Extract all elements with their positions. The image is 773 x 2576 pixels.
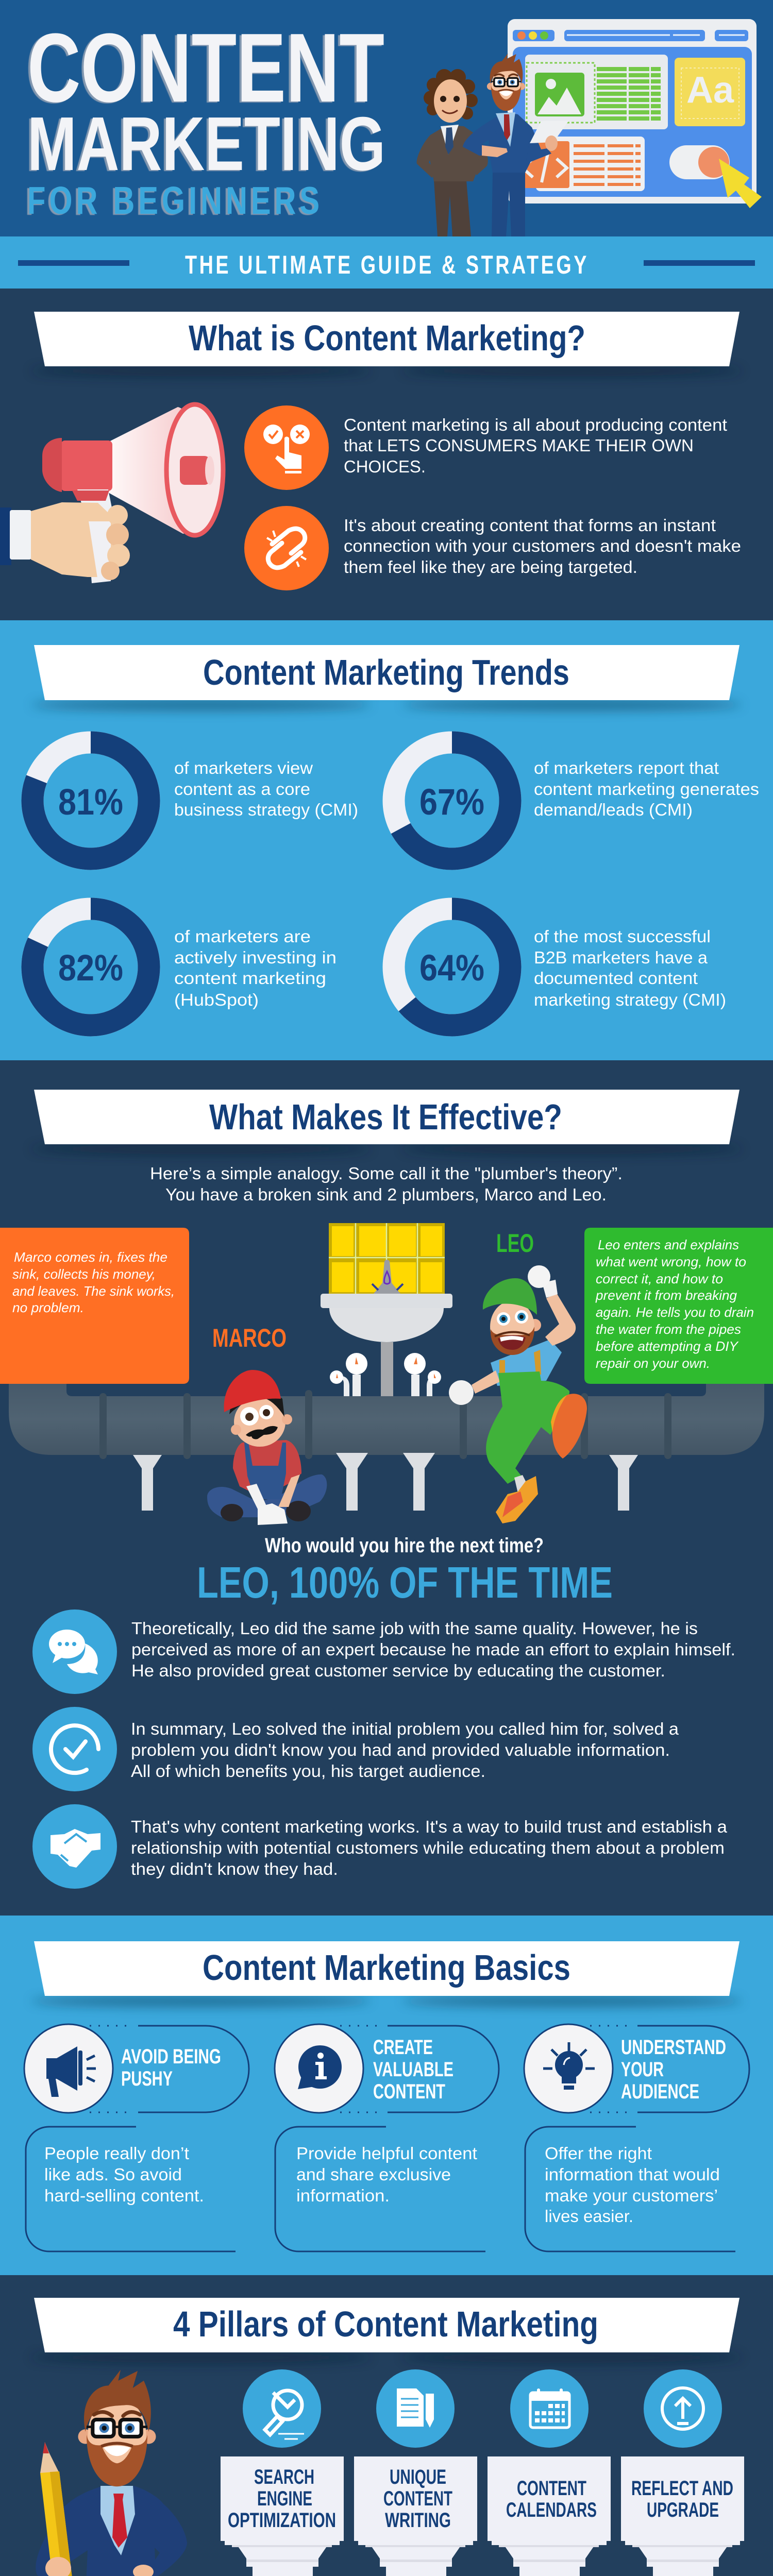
icon: check circle	[32, 1707, 117, 1791]
text box: understand your audience: Offer the right	[545, 2144, 652, 2163]
text box: avoid being pushy: hard-selling content.	[44, 2186, 204, 2205]
donut: 67%	[394, 742, 510, 859]
pillar: content calendars: CONTENT	[517, 2477, 586, 2500]
banner heading: 4 Pillars of Content Marketing	[173, 2304, 598, 2344]
text block: theoretically: perceived as more of an expert because he made an effort to explain himself.	[131, 1640, 735, 1659]
banner heading	[31, 2298, 742, 2363]
character: Marco	[207, 1370, 327, 1525]
pill: create valuable content: VALUABLE	[373, 2058, 453, 2081]
text block: summary: In summary, Leo solved the initial problem you called him for, solved a	[131, 1719, 679, 1738]
text block: theoretically: Theoretically, Leo did the same job with the same quality. However, he is	[131, 1619, 698, 1638]
text block: summary: All of which benefits you, his target audience.	[131, 1761, 485, 1781]
question: Who would you hire the next time?	[265, 1534, 544, 1557]
section: 4 pillars	[0, 2275, 773, 2576]
text box: avoid being pushy: like ads. So avoid	[44, 2165, 182, 2184]
pillar: unique content writing: UNIQUE	[390, 2466, 446, 2488]
title: CONTENT	[27, 13, 384, 123]
donut: 81%	[32, 742, 149, 859]
text block: why it works: That's why content marketing works. It's a way to build trust and establish a	[131, 1817, 728, 1836]
stat text: 82%: (HubSpot)	[174, 990, 259, 1009]
text block: connection: them feel like they are being targeted.	[344, 557, 637, 577]
section: what makes it effective	[0, 1060, 773, 1916]
icon: chain link	[244, 506, 329, 590]
stat text: 64%	[534, 927, 726, 1009]
text block: connection	[344, 516, 741, 577]
callout: Marco: no problem.	[12, 1300, 84, 1315]
donut: 81%: 81%	[58, 782, 123, 823]
pill: understand your audience	[524, 2024, 749, 2113]
text box: create valuable content: Provide helpful content	[296, 2144, 477, 2163]
text box: understand your audience	[525, 2127, 735, 2251]
text box: understand your audience: lives easier.	[545, 2207, 633, 2226]
icon: megaphone and hand	[0, 404, 223, 583]
pill: create valuable content: CONTENT	[373, 2080, 445, 2103]
title: FOR BEGINNERS	[27, 179, 323, 222]
section: content marketing basics	[0, 1916, 773, 2275]
pill: avoid being pushy: AVOID BEING	[121, 2045, 221, 2068]
callout: Leo: before attempting a DIY	[596, 1338, 739, 1354]
text block: connection: It's about creating content that forms an instant	[344, 516, 716, 535]
pillar: content calendars: CALENDARS	[506, 2499, 597, 2521]
tiled window	[329, 1223, 445, 1294]
title: MARKETING	[27, 101, 385, 187]
subtitle band: THE ULTIMATE GUIDE & STRATEGY	[185, 250, 589, 279]
pillar: search engine optimization: SEARCH	[254, 2466, 314, 2488]
banner heading	[31, 1941, 742, 2007]
donut: 82%: 82%	[58, 948, 123, 989]
stat text: 81%: of marketers view	[174, 758, 313, 777]
donut: 82%	[32, 909, 149, 1025]
callout: Leo: again. He tells you to drain	[596, 1304, 754, 1320]
stat text: 82%	[174, 927, 337, 1009]
icon: search	[243, 2369, 321, 2448]
pillar: content calendars	[488, 2369, 611, 2576]
callout: Leo: the water from the pipes	[596, 1321, 741, 1337]
pillar: search engine optimization: OPTIMIZATION	[228, 2509, 336, 2532]
intro text: Here’s a simple analogy. Some call it the "plumber's theory”.	[150, 1164, 623, 1183]
donut: 67%: 67%	[419, 782, 484, 823]
text box: understand your audience: information that would	[545, 2165, 720, 2184]
character: curly-haired man	[417, 69, 488, 236]
icon: info bubble	[298, 2045, 342, 2089]
text block: theoretically	[131, 1619, 735, 1680]
donut: 64%	[394, 909, 510, 1025]
text box: create valuable content	[275, 2127, 485, 2251]
stat text: 81%	[174, 758, 358, 819]
pill: understand your audience: YOUR	[621, 2058, 664, 2081]
sink and faucet	[321, 1260, 452, 1396]
callout: Leo	[584, 1228, 773, 1384]
title	[27, 13, 385, 222]
section: content marketing trends	[0, 620, 773, 1060]
label: Leo: LEO	[496, 1229, 534, 1258]
pillar: unique content writing	[354, 2369, 477, 2576]
text block: summary	[131, 1719, 679, 1781]
pencil	[40, 2442, 92, 2576]
stat text: 82%: of marketers are	[174, 927, 311, 946]
text box: understand your audience: make your customers’	[545, 2186, 718, 2205]
callout: Marco	[0, 1228, 189, 1384]
icon text Aa: Aa	[686, 70, 734, 111]
stat text: 64%: of the most successful	[534, 927, 711, 946]
stat text: 82%: content marketing	[174, 969, 326, 988]
text block: theoretically: He also provided great customer service by educating the customer.	[131, 1661, 665, 1680]
pillar: unique content writing: WRITING	[385, 2509, 451, 2532]
pillar: reflect and upgrade: UPGRADE	[647, 2499, 719, 2521]
pillar: unique content writing: CONTENT	[383, 2487, 452, 2510]
character: man with pencil	[36, 2370, 187, 2576]
pillar: search engine optimization	[221, 2369, 344, 2576]
plumbing pipes illustration	[9, 1384, 764, 1511]
icon: calendar	[510, 2369, 589, 2448]
callout: Leo: repair on your own.	[596, 1355, 710, 1371]
text block: why it works	[131, 1817, 728, 1878]
pill: create valuable content: CREATE	[373, 2036, 433, 2059]
banner heading: Content Marketing Basics	[203, 1947, 570, 1988]
text box: avoid being pushy: People really don’t	[44, 2144, 189, 2163]
stat text: 81%: content as a core	[174, 779, 310, 799]
subtitle band	[0, 236, 773, 289]
banner heading: Content Marketing Trends	[203, 652, 569, 692]
callout: Leo: Leo enters and explains	[598, 1237, 739, 1252]
callout: Marco: Marco comes in, fixes the	[14, 1249, 167, 1265]
label: Marco: MARCO	[212, 1324, 287, 1352]
text block: choices: that LETS CONSUMERS MAKE THEIR OWN	[344, 436, 694, 455]
pressure gauges	[330, 1353, 441, 1396]
icon: document and pen	[376, 2369, 455, 2448]
callout: Leo: what went wrong, how to	[596, 1254, 746, 1269]
callout: Marco: and leaves. The sink works,	[12, 1283, 175, 1299]
pillar: search engine optimization: ENGINE	[257, 2487, 312, 2510]
intro text	[150, 1164, 623, 1204]
text block: summary: problem you didn't know you had and provided valuable information.	[131, 1740, 670, 1759]
banner heading	[31, 1090, 742, 1155]
donut: 64%: 64%	[419, 948, 484, 989]
callout: Marco: sink, collects his money,	[12, 1266, 156, 1282]
stat text: 67%: content marketing generates	[534, 779, 759, 799]
pillar: reflect and upgrade: REFLECT AND	[631, 2477, 733, 2500]
callout: Leo: prevent it from breaking	[595, 1287, 737, 1303]
text box: avoid being pushy	[26, 2127, 236, 2251]
banner heading: What is Content Marketing?	[189, 318, 585, 358]
icon: chat bubbles	[32, 1609, 117, 1694]
icon: light bulb	[543, 2042, 595, 2090]
text block: connection: connection with your customers and doesn't make	[344, 536, 741, 555]
pill: understand your audience: UNDERSTAND	[621, 2036, 726, 2059]
text box: create valuable content: and share exclusive	[296, 2165, 451, 2184]
icon: speaker	[46, 2046, 96, 2097]
browser window illustration	[508, 19, 762, 208]
pill: avoid being pushy: PUSHY	[121, 2067, 173, 2090]
banner heading	[31, 645, 742, 710]
pill: create valuable content	[275, 2024, 499, 2113]
text block: why it works: they didn't know they had.	[131, 1859, 338, 1878]
text block: choices	[344, 415, 727, 476]
icon: choice hand	[244, 405, 329, 490]
header section	[0, 0, 773, 236]
text block: choices: Content marketing is all about producing content	[344, 415, 727, 434]
callout: Leo: correct it, and how to	[596, 1271, 723, 1286]
character: Leo	[449, 1265, 587, 1523]
banner heading	[31, 312, 742, 377]
pill: avoid being pushy	[24, 2024, 249, 2113]
text box: create valuable content: information.	[296, 2186, 390, 2205]
stat text: 81%: business strategy (CMI)	[174, 800, 358, 819]
section: what is content marketing	[0, 289, 773, 620]
text block: why it works: relationship with potential customers while educating them about a problem	[131, 1838, 725, 1857]
intro text: You have a broken sink and 2 plumbers, Marco and Leo.	[165, 1185, 607, 1204]
banner heading: What Makes It Effective?	[209, 1097, 562, 1137]
icon: handshake	[32, 1804, 117, 1889]
pill: understand your audience: AUDIENCE	[621, 2080, 699, 2103]
stat text: 64%: documented content	[534, 969, 698, 988]
stat text: 67%: demand/leads (CMI)	[534, 800, 693, 819]
text block: choices: CHOICES.	[344, 457, 426, 476]
answer headline: LEO, 100% OF THE TIME	[197, 1558, 613, 1607]
stat text: 64%: B2B marketers have a	[534, 948, 708, 967]
stat text: 67%	[534, 758, 759, 819]
stat text: 67%: of marketers report that	[534, 758, 719, 777]
stat text: 64%: marketing strategy (CMI)	[534, 990, 726, 1009]
icon: upload circle	[644, 2369, 722, 2448]
stat text: 82%: actively investing in	[174, 948, 337, 967]
character: bearded man with tablet	[463, 54, 569, 236]
pillar: reflect and upgrade	[621, 2369, 744, 2576]
